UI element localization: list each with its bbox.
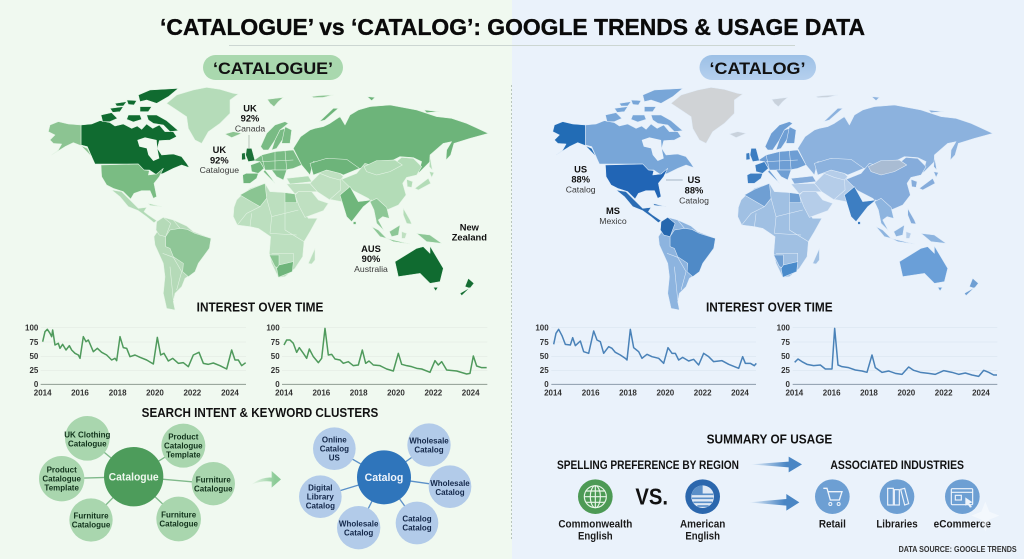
keyword cluster: catalog: Library [307,492,334,501]
keyword cluster: catalog: Catalog [365,472,403,484]
callout: UK Catalogue: 92% [210,155,229,165]
callout: UK Catalogue [200,145,239,175]
line chart: catalog 1: 75 [540,338,549,347]
callout: US Catalog west: US [574,165,587,175]
keyword cluster: catalogue: Furniture [196,476,231,485]
heading: interest over time left: INTEREST OVER TIME [197,300,323,315]
keyword cluster: catalogue: Product [47,466,77,475]
line chart: catalogue 1: 50 [29,352,39,361]
right background panel [512,0,1024,559]
line chart: catalog 1: 2016 [582,389,600,398]
callout: New Zealand: Zealand [452,233,487,243]
callout: US Catalog east [679,175,709,205]
keyword cluster: catalog: Catalog [435,488,465,497]
arrow: lower [749,494,799,511]
world map: catalogue [48,87,488,310]
line chart: catalogue 2: 100 [266,324,280,333]
callout: MS Mexico: MS [606,206,620,216]
keyword cluster: catalog: Catalog [320,445,349,454]
callout: UK Canada: Canada [235,124,265,134]
callout: AUS Australia: Australia [354,264,388,274]
line chart: catalogue 1: 2020 [146,389,164,398]
line chart: catalog 2: 0 [786,380,791,389]
keyword cluster: catalog: US [329,454,341,463]
callout: US Catalog east: 88% [685,185,704,195]
keyword cluster: catalog: Digital [308,483,333,492]
text: retail: Retail [819,519,846,531]
text: american english [680,519,726,543]
line chart: catalog 2 [777,324,997,398]
keyword cluster: catalog: Catalog [344,529,373,538]
line chart: catalogue 1: 2018 [109,389,127,398]
keyword cluster: catalogue: Catalogue [109,472,159,484]
left background panel [0,0,512,559]
callout: US Catalog west: 88% [571,175,591,185]
keyword cluster: catalogue: Catalogue [164,442,203,451]
pill heading: catalogue: ‘CATALOGUE’ [213,59,333,78]
line chart: catalog 2: 100 [777,324,791,333]
line chart: catalog 1: 0 [544,380,549,389]
line chart: catalog 2: 2014 [785,389,804,398]
line chart: catalog 2: 25 [781,366,791,375]
line chart: catalogue 1 [25,324,246,398]
keyword cluster: catalog: Catalog [402,515,432,524]
keyword cluster: catalog [299,423,471,549]
pill heading: catalogue [203,55,343,80]
line chart: catalog 1: 2018 [619,389,637,398]
keyword cluster: catalogue: Catalogue [194,485,233,494]
line chart: catalog 2: 2016 [823,389,841,398]
icon: american flag [685,479,720,514]
line chart: catalogue 2: 2022 [424,389,443,398]
keyword cluster: catalogue: UK Clothing [64,431,111,440]
text: commonwealth english: Commonwealth [558,519,633,531]
line chart: catalog 2: 2020 [897,389,916,398]
title: ‘CATALOGUE’ vs ‘CATALOG’: GOOGLE TRENDS & USAGE DATA [160,14,865,40]
world map: catalog [553,87,993,310]
text: american english: English [685,531,720,543]
callout: MS Mexico: Mexico [599,216,627,226]
keyword cluster: catalog: Catalog [402,524,432,533]
line chart: catalog 1: 2022 [694,389,712,398]
text: libraries: Libraries [876,519,918,531]
keyword cluster: catalogue: Catalogue [68,440,107,449]
line chart: catalogue 1: 75 [29,338,39,347]
icon: libraries books [880,479,914,514]
keyword cluster: catalogue: Catalogue [159,519,199,528]
callout: US Catalog east: Catalog [679,195,709,205]
icon: globe [578,479,613,514]
callout: AUS Australia: 90% [362,254,381,264]
lower right section [535,300,1017,554]
callout: UK Catalogue: Catalogue [200,165,239,175]
callout: UK Canada [235,104,265,134]
line chart: catalog 1: 2020 [656,389,675,398]
line chart: catalogue 1: 2016 [71,389,89,398]
line chart: catalogue 1: 100 [25,324,39,333]
right map callouts [566,165,709,226]
line chart: catalogue 2: 2020 [387,389,405,398]
heading: spelling preference: SPELLING PREFERENCE BY REGION [557,458,739,472]
text: commonwealth english [558,519,633,543]
pill heading: catalog [700,55,816,80]
line chart: catalog 2: 2018 [860,389,878,398]
text: ecommerce: eCommerce [934,519,991,531]
heading: associated industries: ASSOCIATED INDUSTRIES [830,458,964,472]
keyword cluster: catalog: Wholesale [409,437,449,446]
callout: New Zealand: New [460,223,480,233]
line chart: catalogue 2: 25 [271,366,280,375]
line chart: catalog 2: 50 [781,352,791,361]
keyword cluster: catalogue: Furniture [73,511,109,520]
left map callouts [200,104,487,274]
heading: search intent: SEARCH INTENT & KEYWORD CLUSTERS [142,405,378,420]
callout: MS Mexico [599,206,627,226]
heading: interest over time right: INTEREST OVER TIME [706,300,833,315]
arrow: upper [750,457,802,472]
line chart: catalogue 2 [266,324,487,398]
line chart: catalog 1: 50 [540,352,549,361]
text: vs: VS. [635,483,668,509]
line chart: catalog 1: 2024 [731,389,749,398]
line chart: catalog 2: 75 [781,338,791,347]
lower left section [25,300,487,549]
keyword cluster: catalogue: Catalogue [42,475,82,484]
keyword cluster: catalog: Online [322,436,347,445]
keyword cluster: catalogue: Template [44,484,79,493]
callout: UK Canada: UK [243,104,257,114]
line chart: catalogue 2: 50 [271,352,280,361]
line chart: catalogue 1: 0 [34,380,39,389]
line chart: catalog 2: 2024 [972,389,990,398]
callout: UK Catalogue: UK [213,145,226,155]
line chart: catalog 1: 25 [540,366,549,375]
keyword cluster: catalog: Wholesale [339,520,379,529]
line chart: catalogue 2: 2018 [350,389,368,398]
keyword cluster: catalog: Wholesale [430,479,470,488]
text: american english: American [680,519,726,531]
line chart: catalog 1: 2014 [544,389,562,398]
callout: US Catalog west: Catalog [566,185,596,195]
line chart: catalogue 2: 2014 [275,389,293,398]
keyword cluster: catalogue: Catalogue [72,520,111,529]
line chart: catalogue 1: 25 [29,366,39,375]
callout: US Catalog west [566,165,596,195]
keyword cluster: catalog: Catalog [414,446,444,455]
line chart: catalog 1 [535,324,756,398]
arrow: green curved [251,471,281,488]
icon: retail cart [815,479,850,514]
callout: US Catalog east: US [688,175,700,185]
heading: summary of usage: SUMMARY OF USAGE [707,432,832,447]
keyword cluster: catalogue: Product [168,433,199,442]
line chart: catalogue 1: 2024 [221,389,239,398]
line chart: catalogue 2: 0 [275,380,280,389]
keyword cluster: catalogue: Template [166,451,201,460]
line chart: catalogue 1: 2014 [34,389,52,398]
keyword cluster: catalogue [39,416,235,542]
keyword cluster: catalogue: Furniture [161,510,197,519]
keyword cluster: catalog: Catalog [306,501,335,510]
line chart: catalogue 1: 2022 [183,389,202,398]
text: commonwealth english: English [578,531,613,543]
callout: New Zealand [452,223,487,243]
callout: AUS Australia: AUS [361,244,381,254]
line chart: catalog 1: 100 [535,324,549,333]
callout: UK Canada: 92% [241,114,260,124]
line chart: catalogue 2: 2016 [312,389,331,398]
icon: ecommerce browser [945,479,980,514]
line chart: catalogue 2: 2024 [462,389,480,398]
line chart: catalogue 2: 75 [271,338,280,347]
pill heading: catalog: ‘CATALOG’ [710,59,806,78]
callout: AUS Australia [354,244,388,274]
line chart: catalog 2: 2022 [935,389,953,398]
